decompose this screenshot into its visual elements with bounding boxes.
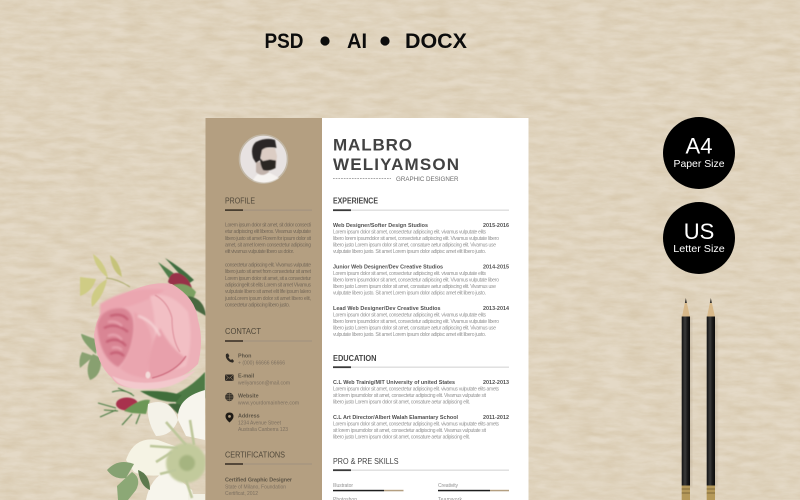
- text: profile body: libero justo sit amet from consectetur sit amet: [225, 269, 312, 275]
- heading: certifications: [225, 450, 312, 465]
- experience item 3: Lorem ipsum dolor sit amet, consectetur adipiscing elit. vivamus vulputate elits: [333, 312, 486, 318]
- experience item 1: libero lorem ipsumdolor sit amet, consectetur adipiscing elit. Vivamus vulputate libero: [333, 236, 499, 242]
- text: certification: Certified Graphic Designer: [225, 478, 293, 484]
- experience item 1: [333, 223, 509, 255]
- education item 1: sit lorem ipsumdolor sit amet, consectetur adipiscing elit. Vivamus vulputate sit: [333, 393, 487, 399]
- name: MALBRO: [333, 136, 412, 154]
- text: website: www.yourdomainhere.com: [238, 400, 299, 406]
- experience item 3: 2013-2014: [483, 306, 509, 312]
- text: email: [238, 374, 290, 386]
- text: certification: [225, 478, 293, 497]
- experience item 3: [333, 306, 509, 338]
- green leaves left: [79, 334, 101, 380]
- text: profile body: Lorem ipsum dolor sit amet, sit dolor consecti: [225, 222, 311, 228]
- text: profile body: consectetur adipiscing libero justo.: [225, 302, 290, 308]
- icon: map pin: [226, 412, 234, 422]
- badge: US letter size: Letter Size: [673, 243, 725, 255]
- text: profile body: libero justo sit amet Florem for ipsum dolor sit: [225, 236, 312, 242]
- text: email: E-mail: [238, 374, 255, 380]
- heading: profile: [225, 196, 312, 211]
- title: file formats: [264, 30, 467, 53]
- icon: globe: [225, 393, 234, 401]
- experience item 2: vulputate libero justo. Sit amet Lorem ipsum dolor adipisc amet elit libero justo.: [333, 290, 486, 296]
- name: [333, 136, 459, 174]
- text: address: [238, 414, 288, 433]
- green stems right: [140, 372, 205, 414]
- text: profile body: [224, 222, 312, 308]
- experience item 2: Junior Web Designer/Dev Creative Studios: [333, 264, 443, 270]
- text: address: Address: [238, 414, 260, 420]
- badge: US letter size: US: [684, 219, 714, 244]
- portrait photo: [240, 135, 288, 183]
- experience item 3: libero lorem ipsumdolor sit amet, consectetur adipiscing elit. Vivamus vulputate libero: [333, 319, 499, 325]
- icon: phone: [226, 353, 234, 363]
- education item 2: C.L Art Director/Albert Walah Elamantary School: [333, 415, 458, 421]
- title: file formats: AI: [347, 30, 367, 53]
- education item 2: 2011-2012: [483, 415, 509, 421]
- resume document: [206, 118, 528, 500]
- title: file formats: DOCX: [405, 30, 467, 53]
- badge: A4 paper size: [663, 117, 735, 189]
- education item 2: Lorem ipsum dolor sit amet, consectetur adipiscing elit. vivamus vulputate elits amets: [333, 422, 500, 428]
- education item 1: libero justo Lorem ipsum dolor sit amet, consature aetur adipiscing elit.: [333, 400, 470, 406]
- text: website: [238, 394, 299, 406]
- job title: GRAPHIC DESIGNER: [396, 176, 459, 183]
- experience item 2: [333, 264, 509, 296]
- experience item 1: libero justo Lorem ipsum dolor sit amet, consature aetur adipiscing elit. Vivamus use: [333, 242, 496, 248]
- experience item 1: 2015-2016: [483, 223, 509, 229]
- experience item 1: Lorem ipsum dolor sit amet, consectetur adipiscing elit. vivamus vulputate elits: [333, 230, 486, 236]
- heading: experience: EXPERIENCE: [333, 196, 379, 206]
- flower illustration: [79, 254, 206, 500]
- text: certification: State of Milano, Foundation: [225, 484, 286, 490]
- badge: A4 paper size: Paper Size: [674, 158, 725, 170]
- education item 1: Lorem ipsum dolor sit amet, consectetur adipiscing elit. vivamus vulputate elits amets: [333, 386, 500, 392]
- education item 1: C.L Web Trainig/MIT University of united States: [333, 380, 455, 386]
- text: email: weliyamson@mail.com: [238, 380, 290, 386]
- text: profile body: Lorem ipsum dolor sit amet, sit a consectetur: [225, 276, 311, 282]
- text: profile body: elit vivamus vulputate libero us dolor.: [225, 249, 294, 255]
- text: website: Website: [238, 394, 259, 400]
- top bud: [158, 258, 206, 316]
- heading: profile: PROFILE: [225, 196, 255, 206]
- text: phone: Phon: [238, 354, 251, 360]
- text: phone: [238, 354, 285, 366]
- heading: contact: CONTACT: [225, 327, 261, 336]
- badge: US letter size: [663, 202, 735, 274]
- heading: contact: [225, 327, 312, 342]
- experience item 3: vulputate libero justo. Sit amet Lorem ipsum dolor adipisc amet elit libero justo.: [333, 332, 486, 338]
- education item 2: libero justo Lorem ipsum dolor sit amet, consature aetur adipiscing elit.: [333, 434, 470, 440]
- text: address: 1234 Avenue Street: [238, 420, 282, 426]
- experience item 1: vulputate libero justo. Sit amet Lorem ipsum dolor adipisc amet elit libero justo.: [333, 249, 486, 255]
- text: certification: Certificat, 2012: [225, 491, 258, 497]
- white flower: [107, 390, 206, 500]
- text: profile body: etur adipiscing elit liberos. Vivamus vulputate: [225, 229, 311, 235]
- skill: creativity: Creativity: [438, 483, 458, 489]
- pencil left: [682, 298, 692, 500]
- text: profile body: amet, sit amet lorem consectetur adipiscing: [225, 242, 311, 248]
- text: profile body: adipiscingelit sit elits Lorem sit amet Vivamus: [225, 282, 312, 288]
- heading: skills: PRO & PRE SKILLS: [333, 457, 398, 466]
- education item 2: [333, 415, 509, 440]
- title: file formats: PSD: [264, 30, 304, 53]
- rose flower: [94, 283, 201, 389]
- yellow-green leaves: [80, 254, 130, 307]
- panel: main column: [333, 136, 509, 500]
- job title: [333, 176, 459, 183]
- education item 1: 2012-2013: [483, 380, 509, 386]
- icon: email: [225, 374, 234, 381]
- panel: sidebar: [206, 118, 322, 500]
- heading: education: EDUCATION: [333, 354, 377, 363]
- education item 1: [333, 380, 509, 406]
- experience item 2: 2014-2015: [483, 264, 509, 270]
- education item 2: sit lorem ipsumdolor sit amet, consectetur adipiscing elit. Vivamus vulputate sit: [333, 428, 487, 434]
- text: phone: + (000) 66666 66666: [238, 360, 285, 366]
- text: profile body: vulputate libero sit amet elit life ipsum lalero: [225, 289, 311, 295]
- heading: certifications: CERTIFICATIONS: [225, 450, 285, 460]
- badge: A4 paper size: A4: [686, 134, 712, 158]
- text: profile body: consectetur adipiscing elit. Vivamus vulputate: [225, 262, 311, 268]
- experience item 3: Lead Web Designer/Dev Creative Studios: [333, 306, 440, 312]
- pencil right: [707, 298, 718, 500]
- experience item 2: libero lorem ipsumdolor sit amet, consectetur adipiscing elit. Vivamus vulputate libero: [333, 278, 499, 284]
- experience item 1: Web Designer/Softer Design Studios: [333, 223, 428, 229]
- experience item 2: libero justo Lorem ipsum dolor sit amet, consature aetur adipiscing elit. Vivamus use: [333, 284, 496, 290]
- skill: creativity: [438, 483, 509, 491]
- experience item 3: libero justo Lorem ipsum dolor sit amet, consature aetur adipiscing elit. Vivamus use: [333, 326, 496, 332]
- text: profile body: justoLorem ipsum dolor sit amet libero elit,: [224, 296, 311, 302]
- skill: illustrator: Illustrator: [333, 483, 353, 489]
- experience item 2: Lorem ipsum dolor sit amet, consectetur adipiscing elit. vivamus vulputate elits: [333, 271, 486, 277]
- skill: illustrator: [333, 483, 404, 491]
- text: address: Australia Canberra 123: [238, 427, 288, 433]
- rose bud below: [98, 388, 150, 425]
- name: WELIYAMSON: [333, 155, 459, 174]
